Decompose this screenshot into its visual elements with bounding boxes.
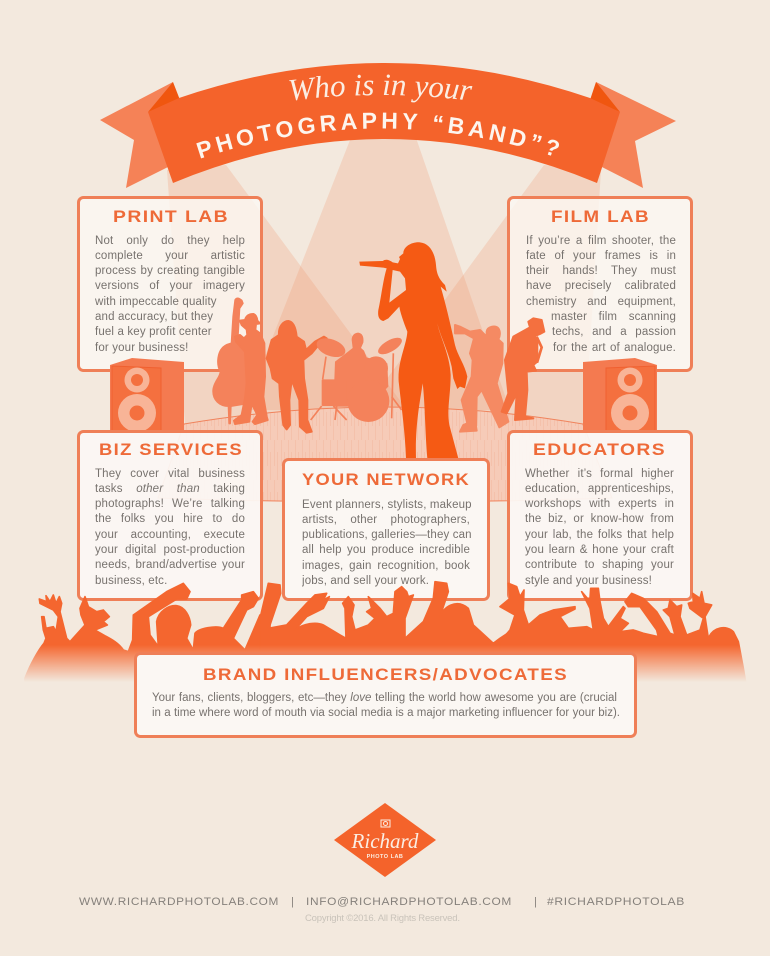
panel: biz services	[78, 432, 262, 600]
text: print lab body: with impeccable quality	[95, 296, 217, 308]
bassist and guitarist	[213, 298, 327, 433]
text: your network body: artists, other photographers,	[302, 514, 470, 526]
text: your network body	[302, 498, 480, 592]
text: biz services body: needs, brand/advertise your	[95, 559, 245, 571]
bassist	[234, 314, 268, 424]
text: educators body: workshops with experts in	[525, 498, 674, 510]
banner title: PHOTOGRAPHY “BAND”?	[196, 112, 559, 158]
spotlights	[167, 135, 601, 425]
footer links: |	[534, 896, 537, 908]
panel: your network	[284, 460, 488, 600]
text: print lab body: complete your artistic	[95, 250, 245, 262]
speaker: right	[583, 358, 657, 432]
banner script line: Who is in your	[289, 74, 472, 102]
text: film lab body: fate of your frames is in	[526, 250, 676, 262]
panel: film lab	[508, 198, 692, 370]
text: educators body: contribute to shaping your	[525, 559, 674, 571]
panel: educators	[508, 432, 692, 600]
copyright: Copyright ©2016. All Rights Reserved.	[305, 913, 460, 924]
text: educators body: your lab, the folks that help	[525, 529, 674, 541]
text: film lab body: have precisely calibrated	[526, 280, 676, 292]
snare	[322, 379, 347, 406]
text: film lab body: chemistry and equipment,	[526, 296, 676, 308]
drum kit	[311, 333, 404, 422]
text: film lab body: master film scanning	[551, 311, 676, 323]
tom	[364, 356, 388, 380]
text: biz services body: They cover vital business	[95, 468, 245, 480]
text: educators body: education, apprenticeships,	[525, 483, 674, 495]
logo	[334, 803, 436, 877]
text: brand influencers body	[152, 691, 630, 723]
text: print lab body: versions of your imagery	[95, 280, 245, 292]
text: educators body	[525, 466, 685, 590]
text: your network body: images, gain recognition, book	[302, 560, 470, 572]
text: print lab body	[95, 234, 255, 358]
text: educators body: you learn & hone your craft	[525, 544, 674, 556]
text: film lab body: for the art of analogue.	[553, 342, 676, 354]
footer links: #RICHARDPHOTOLAB	[547, 896, 685, 908]
footer links	[79, 896, 685, 908]
text: print lab body: and accuracy, but they	[95, 311, 213, 323]
drummer	[333, 333, 388, 407]
text: print lab body: process by creating tangible	[95, 265, 245, 277]
text: your network body: publications, galleries—they can	[302, 529, 472, 541]
heading: brand influencers: BRAND INFLUENCERS/ADVOCATES	[203, 666, 568, 684]
text: educators body: the biz, or know-how from	[525, 513, 674, 525]
logo script: Richard	[351, 829, 419, 853]
panel: print lab	[78, 198, 262, 370]
text: educators body: style and your business!	[525, 575, 652, 587]
cymbal stands	[311, 353, 402, 420]
text: educators body: Whether it’s formal higher	[525, 468, 674, 480]
crowd silhouette	[25, 582, 747, 688]
text: print lab body: for your business!	[95, 342, 188, 354]
banner right fold	[590, 82, 620, 112]
text: print lab body: Not only do they help	[95, 234, 245, 246]
singer	[359, 242, 467, 458]
text: film lab body: their hands! They must	[526, 265, 676, 277]
text: biz services body: business, etc.	[95, 575, 167, 587]
heading: biz services: BIZ SERVICES	[99, 441, 243, 459]
text: biz services body: your digital post-production	[95, 544, 245, 556]
banner right tail	[596, 82, 676, 188]
saxophonist	[502, 318, 544, 420]
speaker: left	[110, 358, 184, 432]
icon: camera	[381, 820, 390, 827]
saxophone	[530, 337, 542, 363]
heading: educators: EDUCATORS	[533, 441, 666, 459]
banner	[100, 63, 676, 188]
logo subtitle: PHOTO LAB	[367, 854, 403, 860]
footer links: INFO@RICHARDPHOTOLAB.COM	[306, 896, 512, 908]
heading: film lab: FILM LAB	[551, 208, 650, 226]
banner left fold	[148, 82, 180, 112]
right cymbal	[376, 334, 404, 358]
guitarist	[267, 321, 327, 433]
text: biz services body: photographs! We’re talking	[95, 498, 245, 510]
stage floor	[158, 407, 612, 502]
trumpeter	[455, 325, 508, 432]
footer links: WWW.RICHARDPHOTOLAB.COM	[79, 896, 279, 908]
left cymbal	[314, 335, 348, 361]
text: brand influencers body: Your fans, clients, bloggers, etc—they love telling the world how awesome you are (crucial	[152, 692, 617, 704]
heading: your network: YOUR NETWORK	[302, 471, 470, 489]
logo diamond	[334, 803, 436, 877]
text: your network body: Event planners, stylists, makeup	[302, 498, 472, 510]
text: your network body: all help you produce incredible	[302, 544, 470, 556]
text: biz services body: your accounting, execute	[95, 529, 245, 541]
text: film lab body: If you’re a film shooter, the	[526, 234, 676, 246]
text: your network body: jobs, and sell your work.	[302, 575, 429, 587]
text: brand influencers body: in a time where word of mouth via social media is a major marketing influencer for your biz).	[152, 707, 620, 719]
bass drum	[347, 380, 389, 422]
text: film lab body: techs, and a passion	[552, 326, 676, 338]
banner band	[148, 63, 620, 183]
text: print lab body: fuel a key profit center	[95, 326, 212, 338]
text: biz services body	[95, 466, 255, 590]
text: film lab body	[526, 234, 686, 358]
heading: print lab: PRINT LAB	[113, 208, 229, 226]
footer links: |	[291, 896, 294, 908]
panel: brand influencers	[136, 654, 636, 736]
text: biz services body: the folks you hire to do	[95, 513, 245, 525]
text: biz services body: tasks other than taking	[95, 483, 245, 495]
banner left tail	[100, 82, 173, 188]
double bass	[213, 298, 247, 423]
